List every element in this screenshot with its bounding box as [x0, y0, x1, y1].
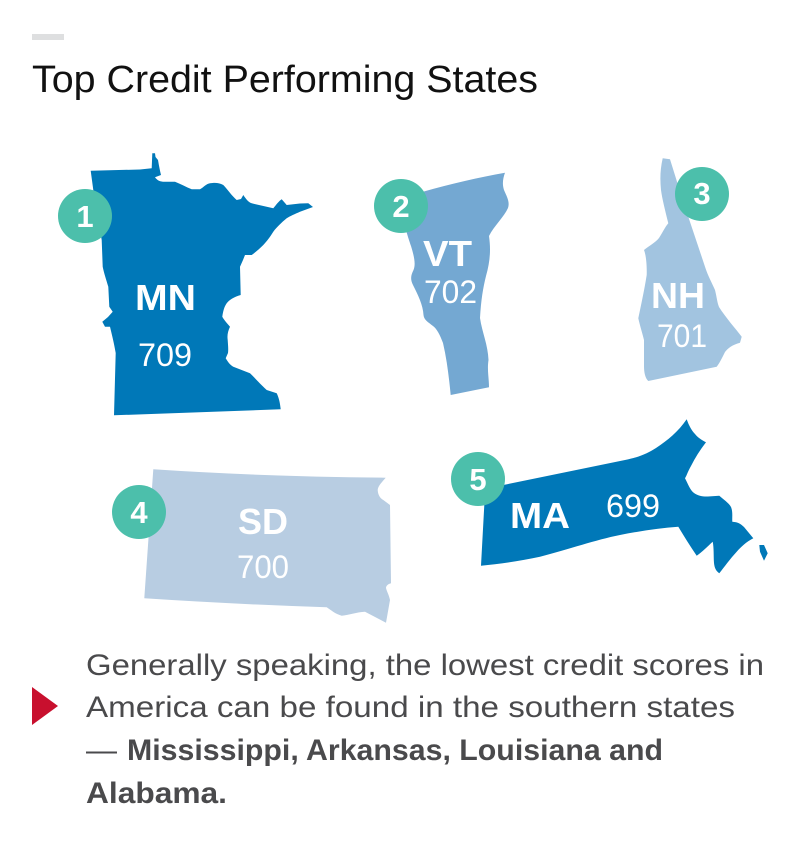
rank badge 5	[451, 452, 505, 506]
score 702: 702	[424, 274, 477, 310]
state label NH: NH	[651, 275, 705, 316]
text block: takeaway	[86, 649, 764, 810]
rank badge 1: 1	[76, 199, 94, 234]
panel: Vermont	[374, 173, 509, 395]
panel: South Dakota	[112, 469, 391, 623]
rank badge 5: 5	[469, 462, 487, 497]
state shape: South Dakota	[144, 469, 391, 623]
state label MN: MN	[135, 277, 196, 318]
title: Top Credit Performing States	[32, 59, 538, 101]
text block: takeaway: —	[86, 734, 117, 767]
text block: takeaway: Alabama.	[86, 777, 227, 810]
panel: Minnesota	[58, 153, 313, 415]
panel: Massachusetts	[451, 419, 768, 573]
score 699: 699	[606, 488, 660, 524]
state shape: Massachusetts	[481, 419, 768, 573]
state label SD: SD	[238, 501, 288, 542]
title accent bar	[32, 34, 64, 40]
text block: takeaway: America can be found in the southern states	[86, 691, 735, 724]
state label MA: MA	[510, 495, 570, 536]
icon: red arrow	[32, 687, 58, 725]
rank badge 3: 3	[693, 176, 711, 211]
score 701: 701	[657, 318, 707, 354]
score 700: 700	[237, 549, 289, 585]
score 709: 709	[138, 337, 192, 373]
text block: takeaway: Generally speaking, the lowest credit scores in	[86, 649, 764, 682]
rank badge 2	[374, 179, 428, 233]
state shape: New Hampshire	[638, 158, 742, 381]
rank badge 4: 4	[130, 495, 148, 530]
state shape: Minnesota	[91, 153, 313, 415]
rank badge 2: 2	[392, 189, 410, 224]
rank badge 3	[675, 167, 729, 221]
state label VT: VT	[423, 233, 472, 274]
rank badge 4	[112, 485, 166, 539]
text block: takeaway: Mississippi, Arkansas, Louisiana and	[127, 734, 663, 767]
state shape: Vermont	[400, 173, 509, 395]
panel: New Hampshire	[638, 158, 742, 381]
rank badge 1	[58, 189, 112, 243]
